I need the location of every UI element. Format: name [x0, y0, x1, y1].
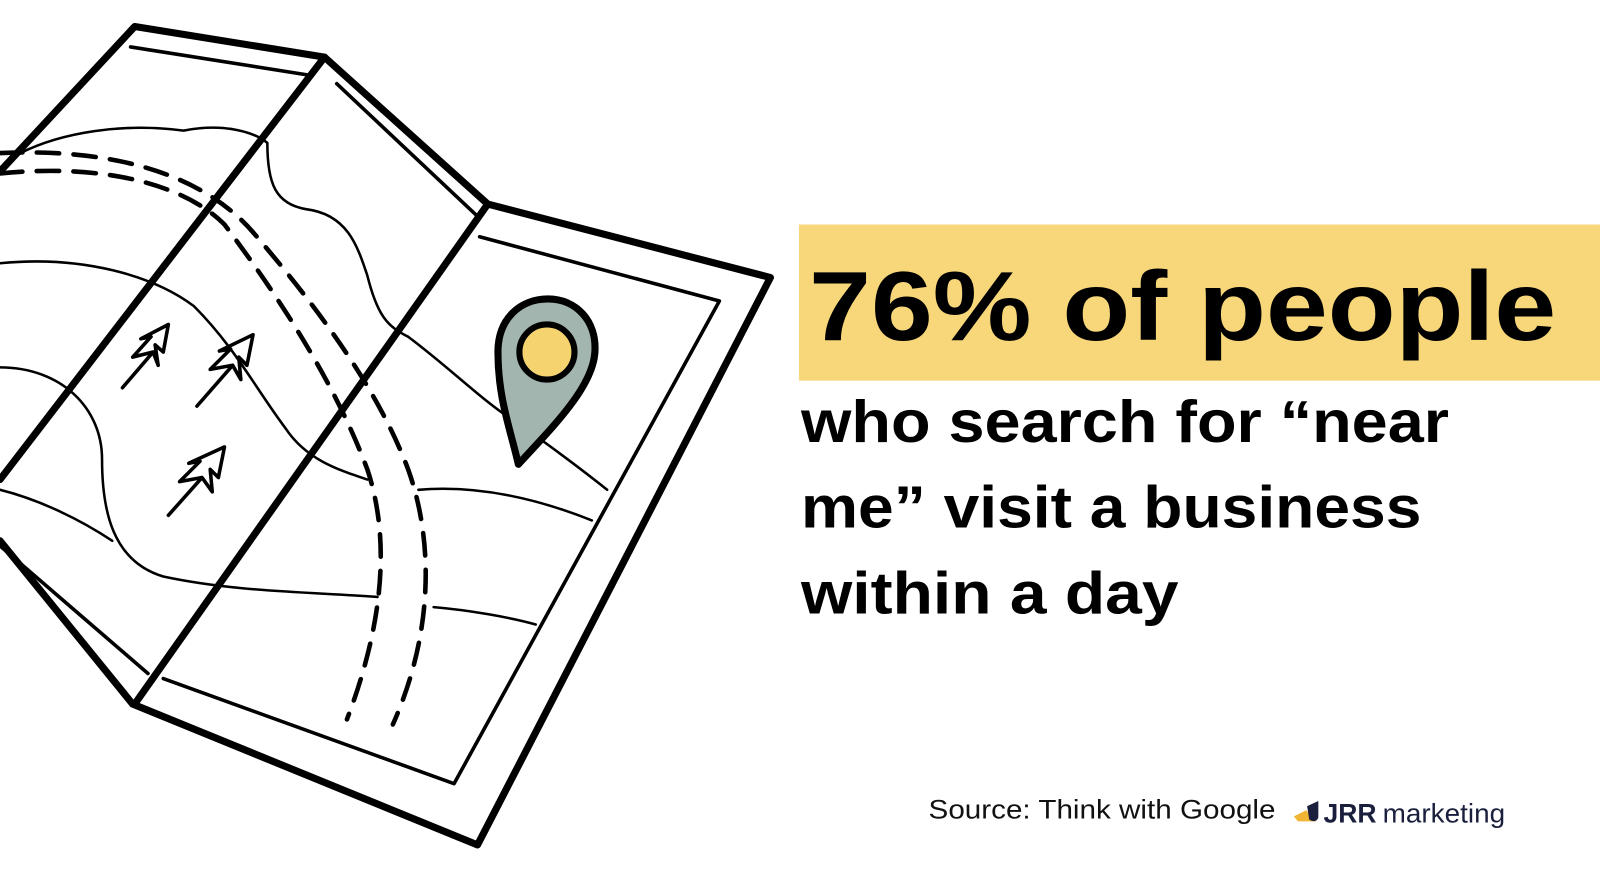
headline text: 76% of people	[809, 251, 1556, 361]
inner borders	[0, 47, 719, 784]
source and logo: JRR	[1323, 798, 1377, 828]
icon: location pin	[498, 299, 595, 464]
body text: within a day	[800, 559, 1179, 626]
source and logo: marketing	[1383, 798, 1505, 828]
body text: me” visit a business	[801, 474, 1421, 541]
body text: who search for “near	[800, 388, 1449, 455]
trees	[122, 324, 253, 515]
source and logo: Source: Think with Google	[929, 794, 1275, 824]
terrain lines	[0, 128, 607, 624]
dashed road	[0, 152, 426, 724]
headline highlight	[799, 224, 1600, 381]
map outline	[0, 27, 770, 845]
